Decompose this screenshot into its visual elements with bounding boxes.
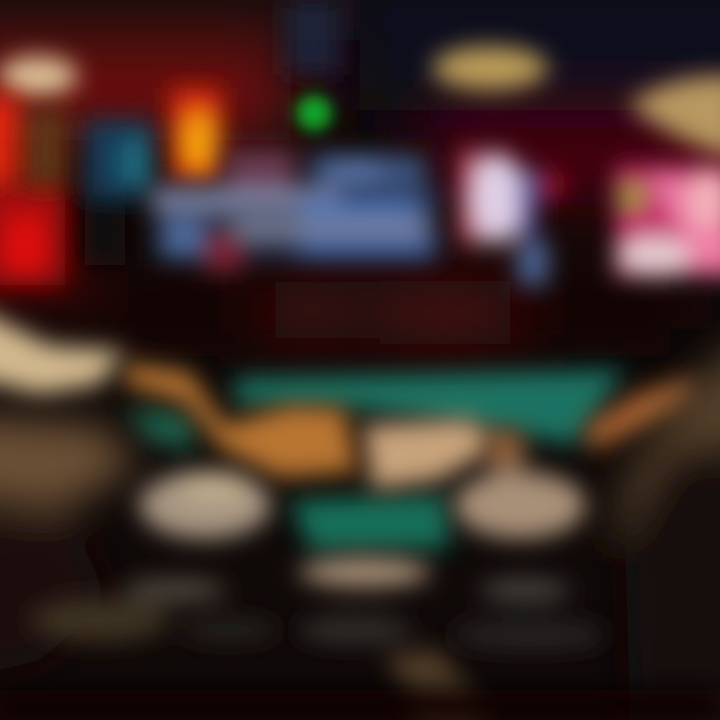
right player: dark body and tan shoulder — [610, 330, 720, 720]
cream table centre — [362, 418, 500, 490]
blue ceiling column — [285, 0, 340, 75]
lamp: top left — [0, 56, 78, 96]
foreground players — [0, 300, 720, 720]
red and orange signage — [0, 88, 332, 285]
centre hands — [297, 557, 490, 720]
ceiling lamps — [0, 0, 720, 160]
right pink screen — [615, 165, 720, 277]
central blue and pink screens — [150, 150, 440, 273]
white and blue screen — [460, 150, 566, 285]
left red panel — [0, 95, 68, 285]
lamp: top right — [628, 76, 720, 160]
table felt — [125, 370, 625, 550]
background: dark ceiling and red walls — [0, 0, 720, 345]
left player: brown torso — [0, 415, 140, 680]
orange player arm — [125, 362, 358, 478]
foreground shadow — [0, 690, 720, 720]
orange right arm — [585, 378, 695, 452]
orange neon sign — [170, 88, 222, 183]
left cards and hands — [30, 471, 280, 642]
left player: cream shoulder — [0, 300, 125, 395]
right cards and hands — [450, 428, 610, 651]
green light — [296, 95, 332, 131]
teal sign — [85, 120, 153, 265]
lamp: top centre — [432, 46, 548, 90]
poker table — [125, 362, 695, 550]
